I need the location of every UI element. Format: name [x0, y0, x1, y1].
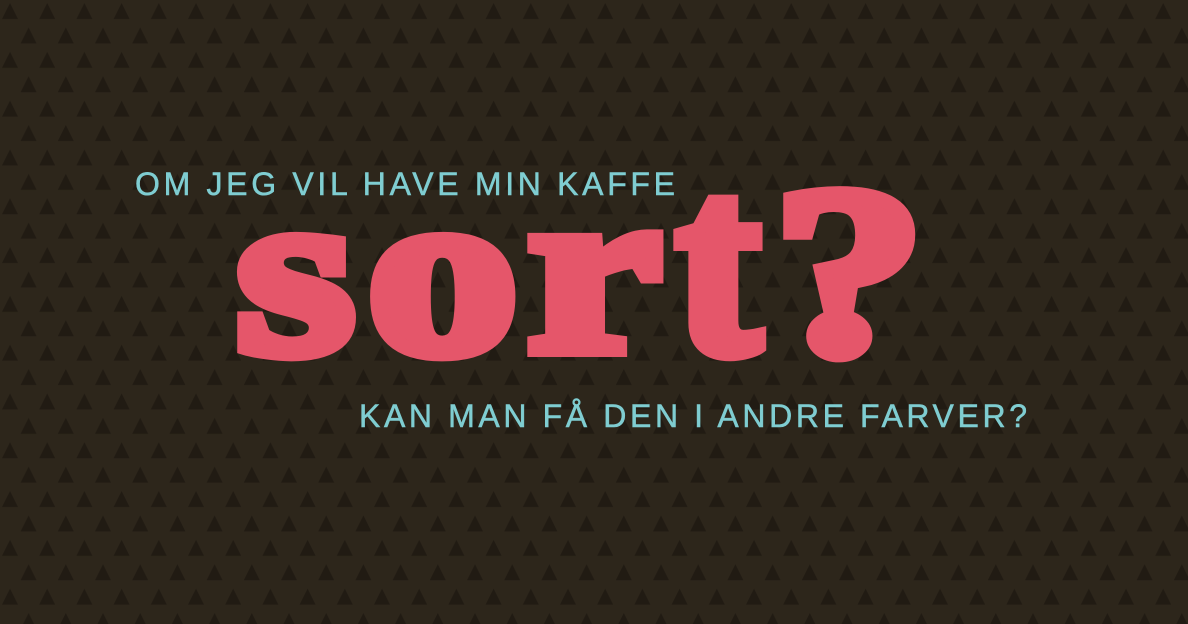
main word: sort?: s [237, 139, 355, 405]
main word: sort?: o [367, 138, 518, 404]
main word: sort?: ? [774, 138, 924, 404]
bottom line of text: KAN MAN FÅ DEN I ANDRE FARVER? [359, 398, 1027, 434]
main word: sort?: t [677, 116, 763, 408]
main word: sort?: r [528, 136, 661, 402]
top line of text: OM JEG VIL HAVE MIN KAFFE [135, 166, 675, 202]
main word: sort? [237, 116, 924, 408]
